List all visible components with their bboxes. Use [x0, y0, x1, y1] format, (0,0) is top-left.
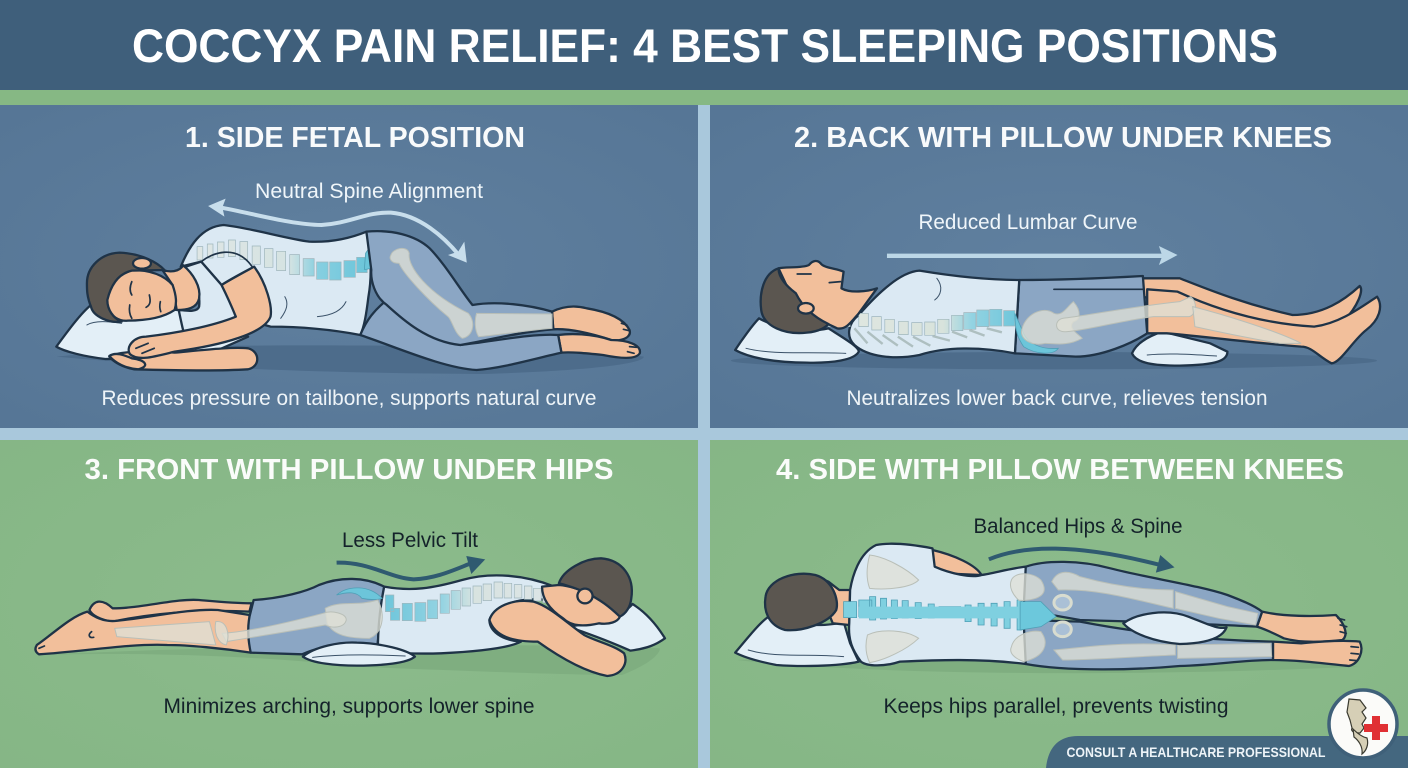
caption: panel 4: Keeps hips parallel, prevents twisting: [884, 695, 1228, 718]
arm: [489, 601, 625, 676]
head: [542, 585, 620, 625]
shirt: [181, 225, 371, 335]
pants: [248, 579, 384, 654]
spine: [828, 307, 1015, 335]
horizontal divider: [0, 428, 1408, 440]
caption: panel 3: Minimizes arching, supports lower spine: [164, 695, 534, 718]
label: balanced hips and spine: Balanced Hips & Spine: [974, 515, 1182, 538]
icon: curved arrow: [337, 556, 485, 579]
spine: [385, 582, 550, 621]
header band: [0, 0, 1408, 105]
far leg: [1143, 278, 1361, 333]
icon: curved arrow: [989, 549, 1175, 573]
pillow: head: [735, 318, 859, 363]
upper arm: [129, 267, 271, 358]
near leg: [35, 610, 251, 654]
label: neutral spine alignment: Neutral Spine Alignment: [255, 180, 483, 203]
icon: straight arrow: [887, 246, 1178, 265]
caption: panel 1: Reduces pressure on tailbone, supports natural curve: [102, 387, 596, 410]
pillow: knees: [1132, 332, 1227, 366]
spine: [844, 597, 1021, 630]
head: [765, 574, 837, 630]
legs: [552, 307, 630, 340]
illustration: back sleeper: [731, 246, 1380, 369]
panel: 1 side fetal position: [0, 105, 698, 428]
panel: 2 back with pillow under knees: [710, 105, 1408, 428]
illustration: side fetal sleeper: [56, 199, 644, 374]
scapulas: [867, 555, 919, 589]
icon: double curved arrow: [208, 199, 467, 263]
neck: [813, 575, 850, 625]
shirt: [849, 271, 1019, 357]
callout: consult banner: CONSULT A HEALTHCARE PROFESSIONAL: [1066, 744, 1326, 760]
illustration: front sleeper: [35, 556, 665, 676]
feet: [1257, 612, 1345, 642]
spine: [197, 240, 367, 280]
shirt: [849, 544, 1026, 665]
arm: [933, 550, 982, 575]
bones: [1021, 302, 1082, 344]
label: reduced lumbar curve: Reduced Lumbar Curve: [918, 211, 1138, 234]
heading: panel 1: 1. SIDE FETAL POSITION: [185, 122, 525, 154]
pillow: head: [735, 617, 859, 666]
icon: spine medical badge: [1329, 690, 1397, 758]
pillow: [56, 305, 248, 359]
pelvis and leg bones: [1010, 574, 1044, 601]
caption: panel 2: Neutralizes lower back curve, relieves tension: [846, 387, 1268, 410]
head: [162, 265, 199, 310]
heading: panel 3: 3. FRONT WITH PILLOW UNDER HIPS: [84, 454, 614, 486]
pants: [1024, 620, 1273, 669]
heading: panel 4: 4. SIDE WITH PILLOW BETWEEN KNEES: [776, 454, 1344, 486]
heading: panel 2: 2. BACK WITH PILLOW UNDER KNEES: [794, 122, 1332, 154]
head: [779, 261, 877, 329]
panel: 3 front with pillow under hips: [0, 440, 698, 768]
title: COCCYX PAIN RELIEF: 4 BEST SLEEPING POSITIONS: [132, 19, 1278, 72]
near leg: [1147, 289, 1380, 363]
label: less pelvic tilt: Less Pelvic Tilt: [342, 529, 478, 552]
callout: consult banner: [1046, 736, 1408, 768]
pants: [1015, 276, 1147, 357]
panel: 4 side with pillow between knees: [710, 440, 1408, 768]
vertical divider: [698, 105, 710, 768]
shirt: [378, 575, 555, 654]
bones: [325, 600, 382, 638]
far leg: [89, 600, 252, 622]
illustration: side sleeper from behind: [735, 544, 1361, 673]
pillow: knees: [1123, 612, 1227, 644]
pillow: hips: [303, 643, 415, 666]
pillow: head: [567, 604, 665, 651]
